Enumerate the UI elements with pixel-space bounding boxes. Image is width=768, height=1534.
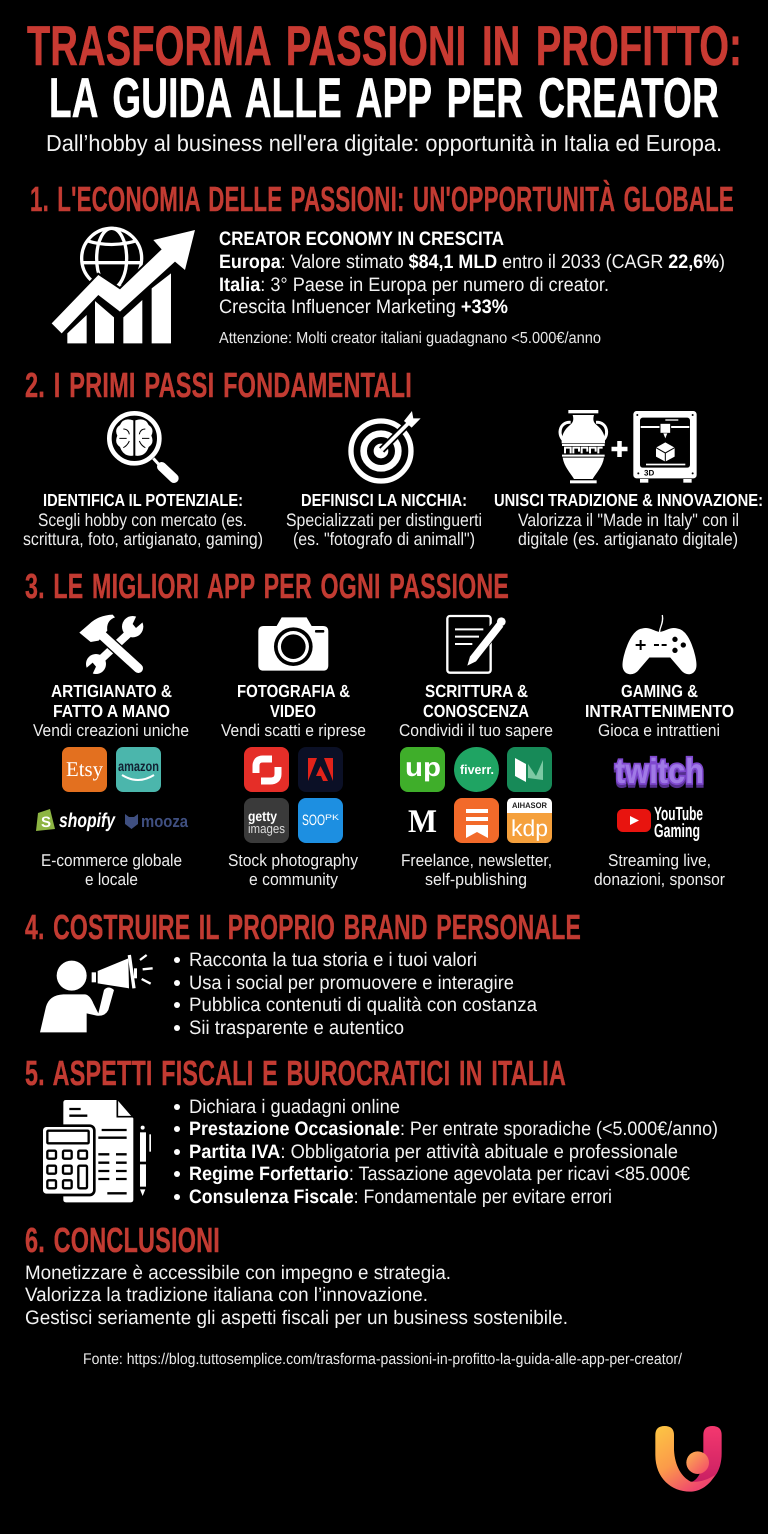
logo: amazon (116, 747, 161, 792)
bullet list: brand (174, 949, 537, 1039)
logo: mooza (125, 812, 188, 831)
bullet list: fiscal: Regime Forfettario: Tassazione agevolata per ricavi <85.000€ (189, 1163, 690, 1185)
text: artigianato title: FATTO A MANO (53, 701, 170, 721)
column: unisci tradizione e innovazione: Valorizza il "Made in Italy" con il (518, 510, 739, 530)
icon: 3D printer: 3D (644, 469, 654, 478)
column: definisci la nicchia: Specializzati per distinguerti (286, 510, 482, 530)
icon: person with megaphone (40, 955, 153, 1032)
text block: creator economy: Europa: Valore stimato $84,1 MLD entro il 2033 (CAGR 22,6%) (219, 251, 725, 273)
logo: soop (298, 798, 343, 843)
column: identifica il potenziale (23, 490, 263, 549)
logo: getty images: getty (248, 808, 277, 824)
logo: etsy (62, 747, 107, 792)
logo: medium M: M (408, 804, 437, 840)
column: gaming (585, 615, 734, 889)
text: scrittura title (399, 681, 553, 740)
logo: youtube gaming: YouTube (654, 804, 703, 825)
text block: creator economy: CREATOR ECONOMY IN CRESCITA (219, 228, 504, 250)
icon: globe and growth arrow (52, 228, 195, 343)
column: definisci la nicchia (286, 490, 482, 549)
logo: kdp (507, 798, 552, 843)
icon: magnifier with brain (109, 413, 174, 478)
text: fotografia title: VIDEO (270, 701, 316, 721)
bullet list: fiscal: Consulenza Fiscale: Fondamentale per evitare errori (189, 1186, 612, 1208)
column: artigianato (33, 614, 189, 889)
panel: section 6 (25, 1221, 568, 1329)
logo: shopify: shopify (59, 810, 116, 832)
text: fotografia title (221, 681, 366, 740)
text: gaming title: INTRATTENIMENTO (585, 701, 734, 721)
column: identifica il potenziale: Scegli hobby con mercato (es. (38, 510, 247, 530)
panel: section 5 (25, 1054, 718, 1208)
text: gaming title: Gioca e intrattieni (598, 721, 720, 740)
text block: conclusions (25, 1262, 568, 1329)
text: scrittura title: CONOSCENZA (423, 701, 529, 721)
logo: shutterstock (244, 747, 289, 792)
caption: streaming (594, 851, 725, 889)
column: identifica il potenziale: IDENTIFICA IL POTENZIALE: (43, 490, 243, 510)
text: artigianato title: ARTIGIANATO & (51, 681, 172, 701)
text: fotografia title: Vendi scatti e riprese (221, 721, 366, 740)
bullet list: brand: Pubblica contenuti di qualità con costanza (189, 994, 537, 1016)
icon: plus (612, 441, 628, 457)
text: scrittura title: Condividi il tuo sapere (399, 721, 553, 740)
text block: conclusions: Gestisci seriamente gli aspetti fiscali per un business sostenibile. (25, 1307, 568, 1329)
panel: section 1 (30, 179, 734, 347)
source line: Fonte: https://blog.tuttosemplice.com/trasforma-passioni-in-profitto-la-guida-alle-app-per-creator/ (83, 1351, 683, 1368)
title (27, 14, 742, 129)
subtitle: Dall’hobby al business nell'era digitale: opportunità in Italia ed Europa. (46, 130, 722, 156)
logo: fiverr (454, 747, 499, 792)
logo: shopify: S (41, 814, 51, 831)
caption: stock photography (228, 851, 358, 889)
logo: etsy: Etsy (66, 757, 103, 781)
logo: shopify (36, 809, 116, 832)
logo: brand mark (655, 1426, 722, 1492)
heading 3: 3. LE MIGLIORI APP PER OGNI PASSIONE (25, 567, 509, 606)
text block: creator economy: Crescita Influencer Marketing +33% (219, 296, 508, 318)
bullet list: fiscal: Prestazione Occasionale: Per entrate sporadiche (<5.000€/anno) (189, 1118, 718, 1140)
text block: creator economy: Attenzione: Molti creator italiani guadagnano <5.000€/anno (219, 330, 601, 347)
logo: mooza: mooza (141, 812, 188, 831)
heading 6: 6. CONCLUSIONI (25, 1221, 220, 1260)
text block: conclusions: Monetizzare è accessibile con impegno e strategia. (25, 1262, 451, 1284)
column: scrittura (399, 616, 553, 889)
text: artigianato title (33, 681, 189, 740)
logo: getty images: images (248, 821, 285, 836)
column: definisci la nicchia: (es. "fotografo di animall") (293, 529, 475, 549)
logo: kdp: kdp (511, 815, 548, 841)
icon: gamepad (623, 615, 696, 673)
heading 2: 2. I PRIMI PASSI FONDAMENTALI (25, 366, 412, 405)
bullet list: brand: Usa i social per promuovere e interagire (189, 972, 514, 994)
panel: section 2 (23, 366, 763, 549)
logo: fiverr: fiverr. (460, 762, 494, 777)
caption: stock photography: Stock photography (228, 851, 358, 870)
bullet list: brand: Racconta la tua storia e i tuoi valori (189, 949, 477, 971)
caption: stock photography: e community (249, 870, 338, 889)
panel: section 4 (25, 908, 581, 1039)
text: artigianato title: Vendi creazioni uniche (33, 721, 189, 740)
logo: youtube gaming (617, 804, 703, 842)
logo: upwork (400, 747, 445, 792)
bullet list: fiscal: Dichiara i guadagni online (189, 1096, 400, 1118)
caption: freelance (401, 851, 552, 889)
icon: hammer and wrench (79, 614, 145, 677)
caption: streaming: donazioni, sponsor (594, 870, 725, 889)
caption: freelance: Freelance, newsletter, (401, 851, 552, 870)
column: identifica il potenziale: scrittura, foto, artigianato, gaming) (23, 529, 263, 549)
text block: creator economy: Italia: 3° Paese in Europa per numero di creator. (219, 274, 609, 296)
column: fotografia (221, 617, 366, 889)
column: unisci tradizione e innovazione (494, 490, 763, 549)
bullet list: brand: Sii trasparente e autentico (189, 1017, 404, 1039)
logo: getty images (244, 798, 289, 843)
logo: amazon: amazon (118, 758, 159, 774)
text: fotografia title: FOTOGRAFIA & (237, 681, 350, 701)
icon: calculator, document and pen (42, 1100, 151, 1202)
caption: e-commerce: E-commerce globale (41, 851, 182, 870)
logo: adobe (298, 747, 343, 792)
text: scrittura title: SCRITTURA & (425, 681, 528, 701)
logo: youtube gaming: Gaming (654, 821, 700, 842)
logo: substack (454, 798, 499, 843)
logo: twitch: twitch (615, 752, 704, 791)
caption: streaming: Streaming live, (608, 851, 711, 870)
logo: upwork: up (405, 752, 441, 782)
panel: section 3 (25, 567, 734, 889)
icon: camera (258, 617, 328, 671)
text block: conclusions: Valorizza la tradizione italiana con l’innovazione. (25, 1284, 428, 1306)
logo: soop: SOO (302, 812, 325, 829)
logo: kdp: AIHASOR (512, 801, 547, 810)
logo: soop: PK (325, 813, 340, 822)
bullet list: fiscal: Partita IVA: Obbligatoria per attività abituale e professionale (189, 1141, 678, 1163)
text block: creator economy (219, 228, 725, 347)
caption: e-commerce: e locale (85, 870, 138, 889)
icon: document and pen (447, 616, 506, 673)
column: definisci la nicchia: DEFINISCI LA NICCHIA: (301, 490, 467, 510)
logo: medium green (507, 747, 552, 792)
icon: target with arrow (351, 411, 421, 481)
bullet list: fiscal (174, 1096, 718, 1208)
icon: greek vase (560, 410, 607, 483)
caption: freelance: self-publishing (425, 870, 527, 889)
caption: e-commerce (41, 851, 182, 889)
text: gaming title: GAMING & (621, 681, 698, 701)
icon: 3D printer (633, 411, 697, 483)
text: gaming title (585, 681, 734, 740)
column: unisci tradizione e innovazione: digitale (es. artigianato digitale) (518, 529, 738, 549)
